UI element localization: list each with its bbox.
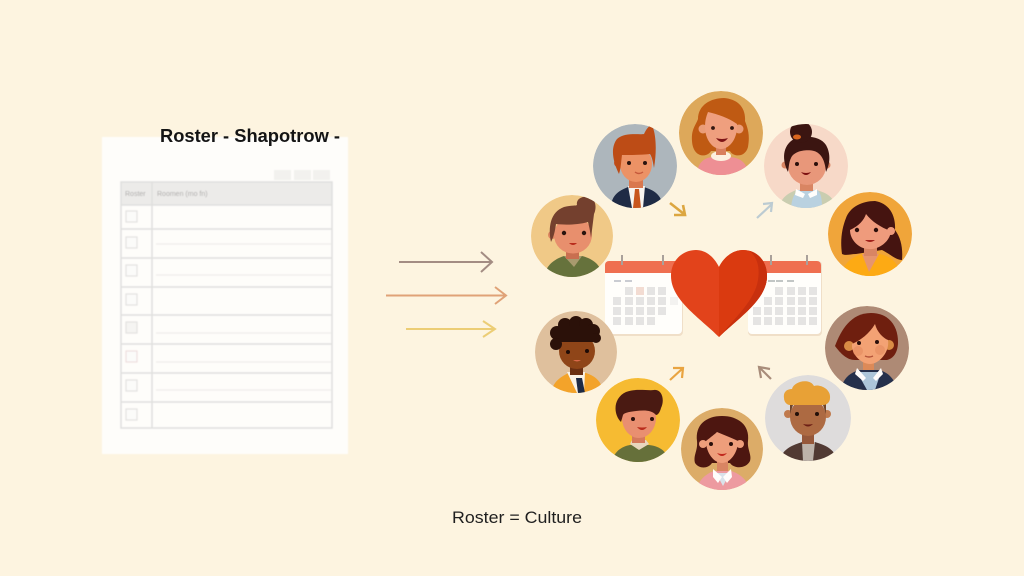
caption: Roster = Culture <box>452 508 582 527</box>
arrow: small orange <box>670 368 683 380</box>
avatar: man on yellow background <box>596 378 680 462</box>
panel: roster sheet <box>102 137 348 454</box>
avatar: woman in pink blouse <box>681 408 763 490</box>
avatar: man in yellow cap <box>765 375 851 461</box>
icon: heart <box>671 250 767 337</box>
table grid <box>121 182 332 428</box>
avatar: man in suit with tie <box>593 124 677 208</box>
icon: left calendar <box>605 255 683 336</box>
toolbar buttons <box>274 170 330 180</box>
table header <box>121 182 332 205</box>
arrow: small gold <box>670 203 685 215</box>
arrow: small brown <box>759 367 771 379</box>
row lines <box>156 244 331 390</box>
avatar: woman in orange top <box>828 192 912 276</box>
table header: Roomen (mo fn) <box>157 191 208 198</box>
arrow: middle flow <box>386 287 506 304</box>
arrow: bottom flow <box>406 321 495 337</box>
arrow: top flow <box>399 252 492 272</box>
avatar: man in green sweater <box>531 195 613 277</box>
icon: right calendar <box>748 255 822 336</box>
avatar: woman with hair bun <box>764 121 848 208</box>
arrow: small blue <box>757 203 772 218</box>
table header: Roster <box>125 191 146 198</box>
row checkboxes <box>126 211 137 420</box>
avatar: man with curly hair <box>535 311 617 393</box>
avatar: woman in pink top <box>679 91 763 175</box>
avatar: woman with bob in blazer <box>825 306 909 390</box>
title: Roster - Shapotrow - <box>160 126 340 146</box>
